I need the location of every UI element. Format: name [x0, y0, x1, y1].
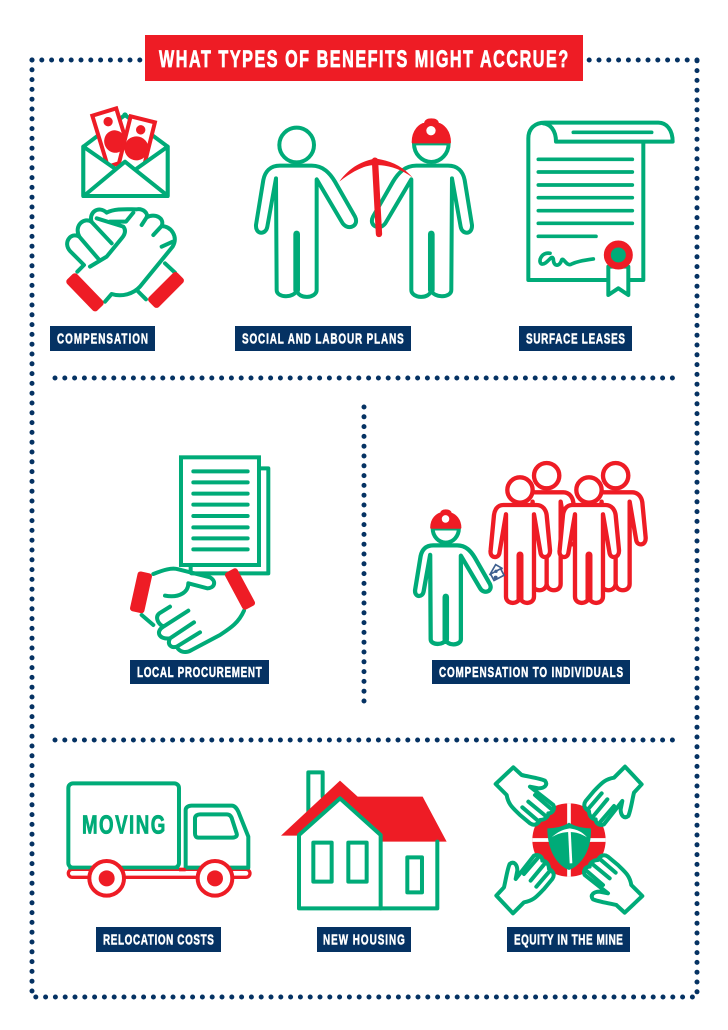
label: new housing: NEW HOUSING	[323, 932, 405, 948]
back person left	[517, 463, 577, 590]
label: relocation costs	[96, 927, 221, 952]
icon: moving truck: MOVING	[82, 809, 165, 839]
icon: house	[281, 772, 447, 908]
panel: social and labour plans	[235, 119, 472, 351]
label: compensation to individuals: COMPENSATION TO INDIVIDUALS	[439, 664, 623, 681]
label: compensation: COMPENSATION	[57, 331, 148, 347]
hand top-right	[584, 767, 642, 825]
panel: local procurement	[129, 457, 269, 684]
label: relocation costs: RELOCATION COSTS	[103, 932, 214, 948]
icon: two workers with pickaxe	[256, 119, 472, 297]
hand bottom-left	[496, 855, 554, 913]
panel: equity in the mine	[496, 767, 642, 952]
panel: surface leases	[519, 123, 673, 351]
icon: hands around shield	[496, 767, 642, 913]
panel: compensation	[50, 108, 185, 351]
label: social and labour plans: SOCIAL AND LABOUR PLANS	[242, 331, 404, 347]
label: equity in the mine	[507, 927, 630, 952]
panel: relocation costs	[68, 783, 250, 952]
title: WHAT TYPES OF BENEFITS MIGHT ACCRUE?	[159, 46, 568, 73]
label: equity in the mine: EQUITY IN THE MINE	[514, 932, 623, 948]
label: new housing	[317, 927, 411, 952]
label: surface leases	[519, 326, 632, 351]
icon: money envelope	[83, 108, 168, 198]
icon: moving truck	[68, 783, 250, 896]
icon: worker paying a group	[415, 463, 646, 644]
hand top-left	[496, 767, 554, 825]
label: local procurement: LOCAL PROCUREMENT	[137, 664, 262, 681]
label: local procurement	[130, 660, 269, 684]
front person left	[491, 477, 550, 603]
front person right	[560, 477, 619, 603]
icon: small banknotes	[490, 565, 504, 581]
hand bottom-right	[584, 855, 642, 913]
panel: compensation to individuals	[415, 463, 646, 684]
label: compensation to individuals	[432, 660, 630, 684]
label: surface leases: SURFACE LEASES	[526, 331, 625, 347]
icon: documents and handshake	[129, 457, 268, 652]
icon: scroll certificate	[528, 123, 673, 295]
label: social and labour plans	[235, 326, 411, 351]
worker	[415, 510, 491, 644]
icon: clasped hands	[65, 209, 185, 313]
title	[145, 35, 583, 81]
back person right	[586, 463, 646, 590]
panel: new housing	[281, 772, 447, 952]
label: compensation	[50, 326, 155, 351]
